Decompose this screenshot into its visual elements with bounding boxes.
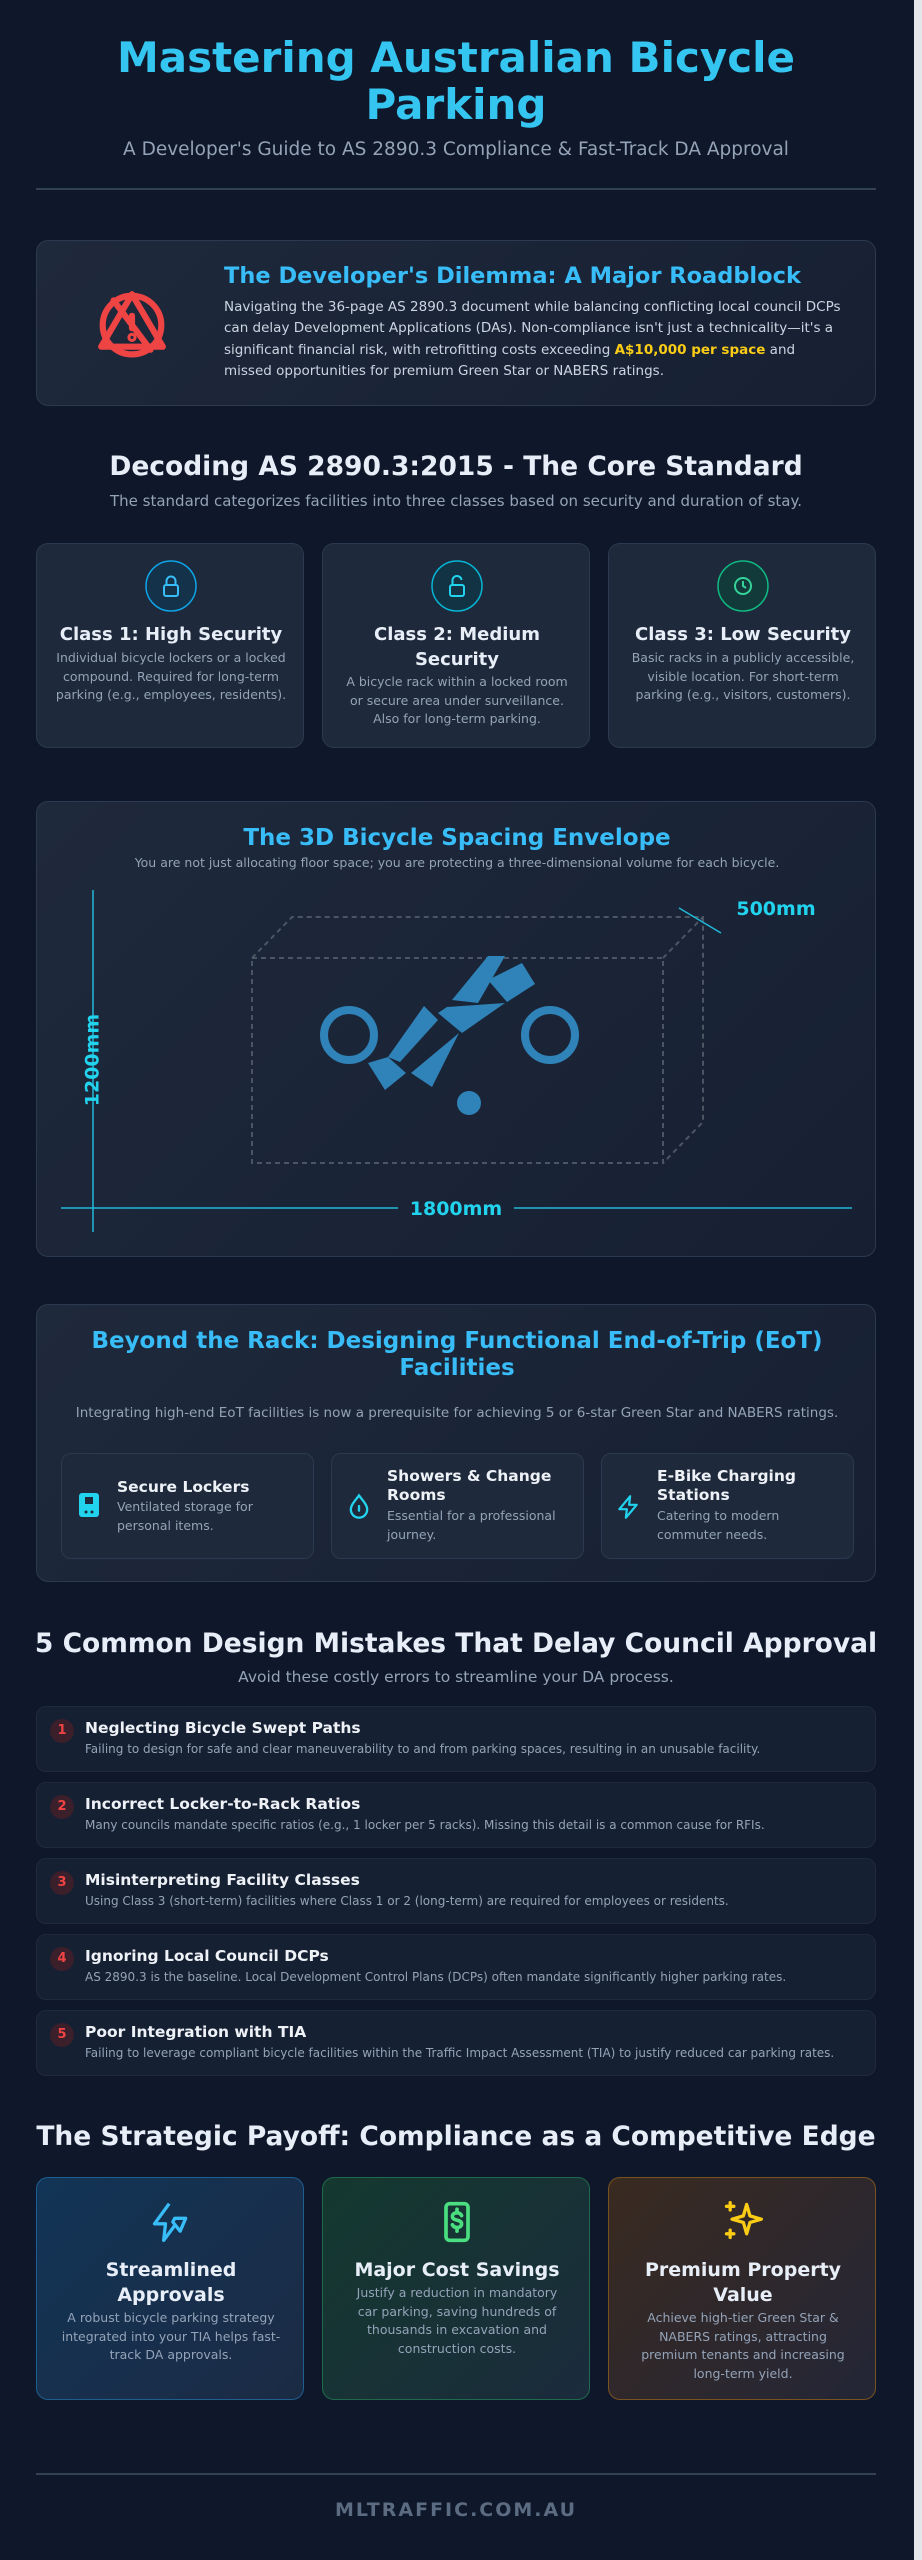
text: significant financial risk, with retrofitting costs exceeding A$10,000 per space and: [224, 342, 795, 358]
mistake 4: 4: [57, 1951, 67, 1966]
icon: clock: [717, 560, 769, 612]
mistake 1: Failing to design for safe and clear maneuverability to and from parking spaces, resulting in an unusable facility.: [85, 1742, 760, 1756]
panel: 3D spacing envelope: [36, 801, 876, 1257]
card: cost savings: Justify a reduction in mandatory car parking, saving hundreds of thousands in excavation and construction costs.: [357, 2285, 557, 2356]
mistake 3: Misinterpreting Facility Classes: [85, 1871, 360, 1889]
icon: warning: [98, 291, 166, 358]
card: property value: Premium Property: [645, 2259, 841, 2281]
footer: MLTRAFFIC.COM.AU: [335, 2499, 577, 2521]
mistake 1: Neglecting Bicycle Swept Paths: [85, 1719, 361, 1737]
card: class 1: [36, 543, 304, 748]
heading: payoff: The Strategic Payoff: Compliance as a Competitive Edge: [36, 2121, 876, 2152]
mistake 4: Ignoring Local Council DCPs: [85, 1947, 329, 1965]
mistake 3: Using Class 3 (short-term) facilities where Class 1 or 2 (long-term) are required for employees or residents.: [85, 1894, 729, 1908]
card: showers: Essential for a professional journey.: [387, 1508, 556, 1542]
card: property value: Value: [713, 2284, 773, 2306]
bicycle icon: [324, 956, 575, 1115]
card: class 3: [608, 543, 876, 748]
dimension: depth: 500mm: [736, 898, 816, 920]
mistake 2: Many councils mandate specific ratios (e.g., 1 locker per 5 racks). Missing this detail is a common cause for RFIs.: [85, 1818, 765, 1832]
subheading: You are not just allocating floor space; you are protecting a three-dimensional volume for each bicycle.: [135, 855, 779, 870]
mistake 2: 2: [57, 1799, 67, 1814]
mistake 2: [36, 1782, 876, 1848]
icon: unlock: [431, 560, 483, 612]
text: can delay Development Applications (DAs). Non-compliance isn't just a technicality—it's a: [224, 320, 833, 336]
text: missed opportunities for premium Green Star or NABERS ratings.: [224, 363, 664, 379]
card: property value: [608, 2177, 876, 2400]
desc: Individual bicycle lockers or a locked compound. Required for long-term parking (e.g., employees, residents).: [56, 650, 286, 702]
heading: decoding: Decoding AS 2890.3:2015 - The Core Standard: [109, 451, 803, 482]
card: lockers: Secure Lockers: [117, 1478, 249, 1496]
card: e-bike charging: [601, 1453, 854, 1559]
title: Class 1: High Security: [60, 624, 282, 645]
icon: fast bolt: [152, 2202, 188, 2242]
subheading: Integrating high-end EoT facilities is now a prerequisite for achieving 5 or 6-star Green Star and NABERS ratings.: [76, 1405, 838, 1421]
subheading: The standard categorizes facilities into three classes based on security and duration of stay.: [110, 492, 802, 510]
title: Mastering Australian Bicycle: [117, 33, 795, 82]
card: lockers: [61, 1453, 314, 1559]
heading: Beyond the Rack: Designing Functional End-of-Trip (EoT): [91, 1328, 823, 1354]
card: property value: Achieve high-tier Green Star & NABERS ratings, attracting premium tenants and increasing long-term yield.: [641, 2310, 845, 2380]
title: Class 3: Low Security: [635, 624, 851, 645]
dimension: width: 1800mm: [410, 1198, 502, 1220]
card: cost savings: [322, 2177, 590, 2400]
mistake 1: [36, 1706, 876, 1772]
mistake 5: Poor Integration with TIA: [85, 2023, 306, 2041]
card: e-bike charging: Catering to modern commuter needs.: [657, 1508, 779, 1542]
heading: The Developer's Dilemma: A Major Roadblock: [224, 263, 801, 289]
title: Parking: [365, 80, 546, 129]
card: approvals: Approvals: [117, 2284, 225, 2306]
icon: bolt: [618, 1495, 638, 1519]
diagram: spacing envelope: [61, 890, 852, 1232]
card: cost savings: Major Cost Savings: [354, 2259, 560, 2281]
desc: Basic racks in a publicly accessible, visible location. For short-term parking (e.g., visitors, customers).: [632, 650, 854, 702]
icon: locker: [79, 1493, 99, 1517]
mistake 3: 3: [57, 1875, 67, 1890]
heading: [91, 1328, 823, 1381]
title: Security: [415, 649, 499, 670]
panel: end-of-trip facilities: [36, 1304, 876, 1582]
card: e-bike charging: E-Bike Charging Stations: [657, 1467, 796, 1504]
title: [117, 33, 795, 129]
icon: lock: [145, 560, 197, 612]
mistake 3: [36, 1858, 876, 1924]
mistake 5: Failing to leverage compliant bicycle facilities within the Traffic Impact Assessment (TIA) to justify reduced car parking rates.: [85, 2046, 834, 2060]
dimension: depth: [679, 898, 816, 933]
mistake 4: [36, 1934, 876, 2000]
mistake 5: [36, 2010, 876, 2076]
card: approvals: A robust bicycle parking strategy integrated into your TIA helps fast-track DA approvals.: [62, 2310, 280, 2362]
panel: developer's dilemma: [36, 240, 876, 406]
heading: mistakes: 5 Common Design Mistakes That Delay Council Approval: [35, 1628, 877, 1659]
card: showers: Showers & Change Rooms: [387, 1467, 551, 1504]
card: approvals: [36, 2177, 304, 2400]
mistake 4: AS 2890.3 is the baseline. Local Development Control Plans (DCPs) often mandate significantly higher parking rates.: [85, 1970, 786, 1984]
title: Class 2: Medium: [374, 624, 540, 645]
desc: A bicycle rack within a locked room or secure area under surveillance. Also for long-term parking.: [346, 674, 568, 726]
scrollbar strip: [914, 0, 922, 2560]
subheading: Avoid these costly errors to streamline your DA process.: [238, 1668, 674, 1686]
text: Navigating the 36-page AS 2890.3 document while balancing conflicting local council DCPs: [224, 299, 841, 315]
heading: The 3D Bicycle Spacing Envelope: [243, 825, 671, 851]
text: [224, 299, 841, 379]
mistake 2: Incorrect Locker-to-Rack Ratios: [85, 1795, 360, 1813]
card: approvals: Streamlined: [106, 2259, 236, 2281]
icon: sparkles: [724, 2201, 763, 2240]
mistake 1: 1: [57, 1723, 67, 1738]
dashed box: [252, 917, 703, 1163]
icon: shower: [350, 1494, 368, 1519]
card: showers: [331, 1453, 584, 1559]
card: class 2: [322, 543, 590, 748]
title: [374, 624, 540, 670]
card: lockers: Ventilated storage for personal items.: [117, 1499, 253, 1532]
subtitle: A Developer's Guide to AS 2890.3 Compliance & Fast-Track DA Approval: [123, 139, 789, 160]
mistake 5: 5: [57, 2027, 67, 2042]
dimension: height: 1200mm: [82, 1014, 104, 1106]
heading: Facilities: [399, 1355, 515, 1381]
icon: dollar: [444, 2202, 470, 2242]
